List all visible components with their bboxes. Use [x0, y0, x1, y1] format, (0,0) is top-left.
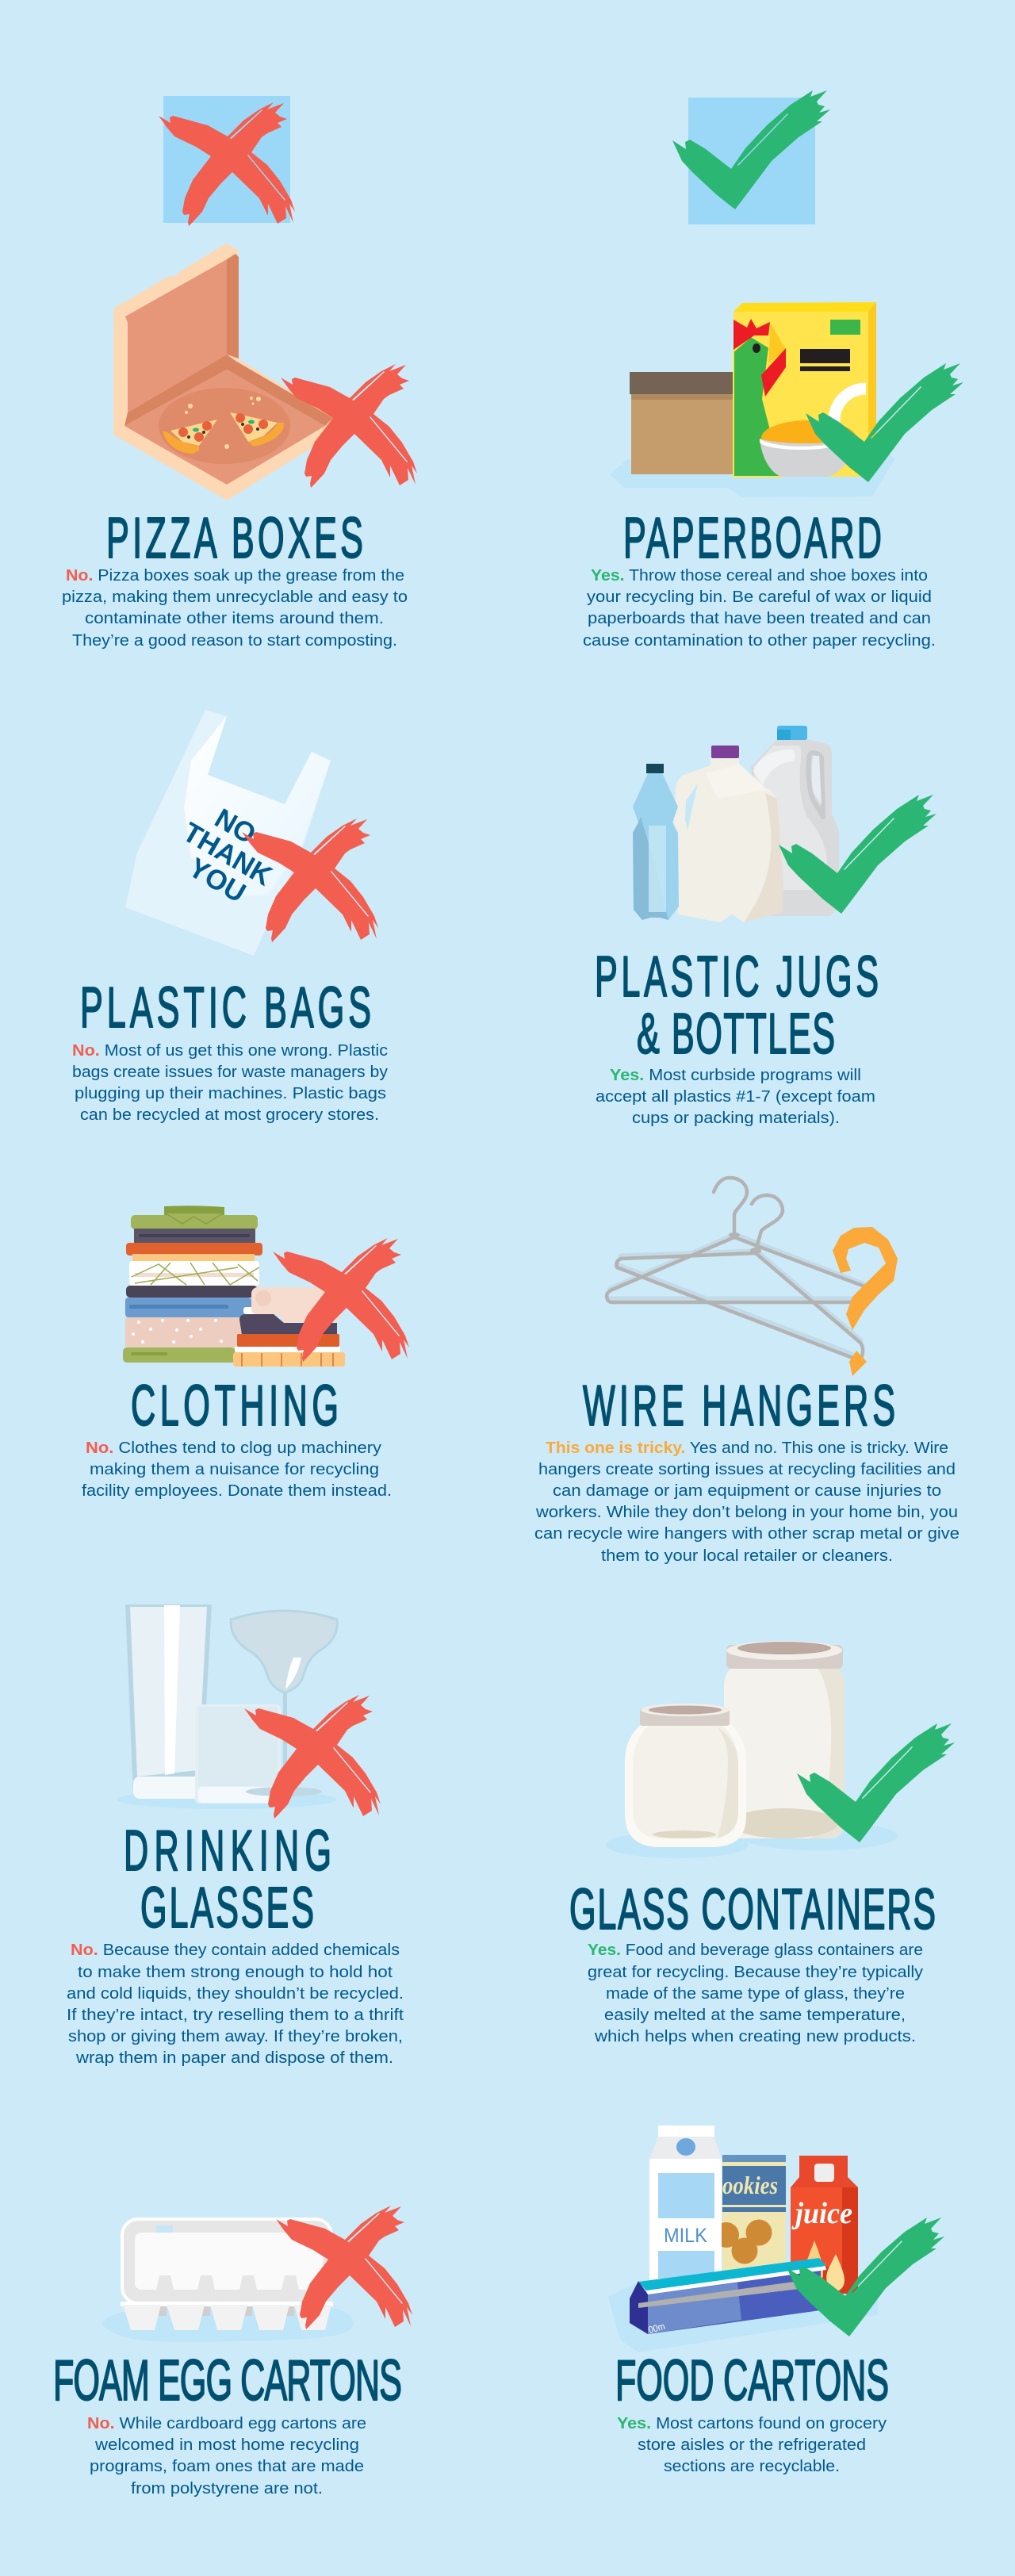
body text: plugging up their machines. Plastic bags: [75, 1085, 386, 1102]
question mark: [833, 1227, 898, 1376]
body text: [617, 2415, 887, 2475]
illustration: egg carton: [102, 2219, 353, 2342]
body text: No. Most of us get this one wrong. Plastic: [72, 1042, 388, 1060]
x mark: [273, 1238, 409, 1362]
body text: wrap them in paper and dispose of them.: [75, 2049, 393, 2067]
illustration: bottles: [633, 726, 839, 922]
illustration: plastic bag: [125, 710, 331, 956]
panel: wire hangers: [534, 1178, 959, 1565]
body text: easily melted at the same temperature,: [604, 2007, 906, 2024]
body text: If they’re intact, try reselling them to a thrift: [67, 2007, 404, 2024]
body text: made of the same type of glass, they’re: [606, 1985, 905, 2003]
heading: PAPERBOARD: [623, 506, 882, 570]
bag slogan: NO: [209, 803, 261, 850]
body text: hangers create sorting issues at recycling facilities and: [538, 1461, 956, 1478]
body text: to make them strong enough to hold hot: [78, 1964, 393, 1981]
heading: GLASS CONTAINERS: [569, 1877, 936, 1942]
body text: facility employees. Donate them instead.: [82, 1482, 392, 1500]
body text: Yes. Throw those cereal and shoe boxes into: [591, 567, 928, 585]
milk label: MILK: [664, 2225, 707, 2247]
body text: Yes. Most cartons found on grocery: [617, 2415, 887, 2432]
illustration: jars: [606, 1641, 898, 1858]
body text: [534, 1439, 959, 1565]
check mark: [779, 795, 936, 914]
legend: no icon: [159, 96, 295, 226]
body text: [62, 567, 408, 650]
heading: GLASSES: [140, 1876, 314, 1940]
body text: accept all plastics #1-7 (except foam: [596, 1088, 875, 1106]
body text: contaminate other items around them.: [85, 610, 384, 627]
body text: No. While cardboard egg cartons are: [87, 2415, 366, 2432]
heading: FOAM EGG CARTONS: [53, 2348, 402, 2413]
heading: WIRE HANGERS: [583, 1374, 895, 1438]
body text: [82, 1439, 392, 1500]
body text: bags create issues for waste managers by: [72, 1064, 388, 1081]
heading: FOOD CARTONS: [615, 2348, 889, 2413]
x mark: [242, 818, 378, 942]
body text: store aisles or the refrigerated: [638, 2436, 866, 2454]
bag slogan: THANK: [178, 817, 278, 892]
body text: can recycle wire hangers with other scrap metal or give: [534, 1525, 959, 1543]
body text: programs, foam ones that are made: [90, 2458, 364, 2475]
body text: This one is tricky. Yes and no. This one is tricky. Wire: [546, 1439, 948, 1457]
body text: Yes. Food and beverage glass containers are: [588, 1942, 923, 1959]
body text: can be recycled at most grocery stores.: [80, 1106, 379, 1124]
juice label: juice: [791, 2197, 852, 2230]
panel: paperboard: [583, 302, 963, 650]
body text: workers. While they don’t belong in your home bin, you: [535, 1504, 958, 1521]
heading: PLASTIC BAGS: [80, 976, 371, 1040]
heading: PLASTIC JUGS: [595, 945, 879, 1009]
body text: Yes. Most curbside programs will: [610, 1067, 861, 1084]
body text: great for recycling. Because they’re typically: [588, 1964, 923, 1981]
panel: pizza boxes: [62, 243, 417, 650]
illustration: clothes stack: [123, 1206, 345, 1367]
body text: No. Clothes tend to clog up machinery: [86, 1439, 381, 1457]
body text: welcomed in most home recycling: [94, 2436, 359, 2454]
x mark: [244, 1695, 381, 1819]
illustration: food cartons: [608, 2126, 878, 2352]
body text: They’re a good reason to start composting.: [72, 632, 397, 650]
panel: plastic jugs and bottles: [595, 726, 936, 1127]
bag slogan: YOU: [183, 852, 251, 909]
body text: cause contamination to other paper recycling.: [583, 632, 936, 650]
body text: paperboards that have been treated and can: [588, 610, 931, 627]
panel: glass containers: [569, 1641, 955, 2045]
legend: yes icon: [672, 90, 830, 224]
body text: [596, 1067, 875, 1127]
body text: No. Pizza boxes soak up the grease from the: [66, 567, 404, 585]
body text: shop or giving them away. If they’re broken,: [68, 2028, 403, 2045]
body text: sections are recyclable.: [664, 2458, 840, 2475]
wrap box label: 00m: [647, 2321, 666, 2336]
body text: and cold liquids, they shouldn’t be recycled.: [67, 1985, 404, 2003]
x mark: [276, 2206, 412, 2329]
body text: [87, 2415, 366, 2497]
illustration: wire hangers: [607, 1178, 864, 1358]
body text: can damage or jam equipment or cause injuries to: [553, 1482, 941, 1500]
heading: PIZZA BOXES: [106, 506, 363, 570]
body text: cups or packing materials).: [632, 1110, 840, 1127]
body text: your recycling bin. Be careful of wax or liquid: [587, 588, 932, 606]
heading: [595, 945, 879, 1066]
illustration: shoe box and cereal box: [610, 302, 895, 497]
check mark: [806, 363, 963, 482]
body text: No. Because they contain added chemicals: [71, 1942, 400, 1959]
x mark: [281, 364, 417, 488]
cookies label: ookies: [722, 2171, 778, 2199]
body text: making them a nuisance for recycling: [90, 1461, 379, 1478]
body text: [67, 1942, 404, 2067]
body text: which helps when creating new products.: [594, 2028, 916, 2045]
panel: food cartons: [608, 2126, 944, 2475]
body text: [72, 1042, 388, 1124]
heading: [124, 1819, 331, 1940]
body text: [588, 1942, 923, 2045]
panel: clothing: [82, 1206, 409, 1500]
panel: drinking glasses: [67, 1604, 404, 2067]
heading: & BOTTLES: [637, 1002, 835, 1066]
body text: from polystyrene are not.: [131, 2480, 323, 2497]
body text: [583, 567, 936, 650]
illustration: pizza box: [113, 243, 333, 500]
panel: plastic bags: [72, 710, 388, 1124]
check mark: [797, 1723, 955, 1842]
body text: pizza, making them unrecyclable and easy to: [62, 588, 408, 606]
illustration: glasses: [117, 1604, 337, 1809]
panel: foam egg cartons: [53, 2206, 412, 2497]
check mark: [787, 2218, 944, 2336]
body text: them to your local retailer or cleaners.: [601, 1547, 893, 1565]
heading: CLOTHING: [131, 1374, 339, 1438]
heading: DRINKING: [124, 1819, 331, 1883]
